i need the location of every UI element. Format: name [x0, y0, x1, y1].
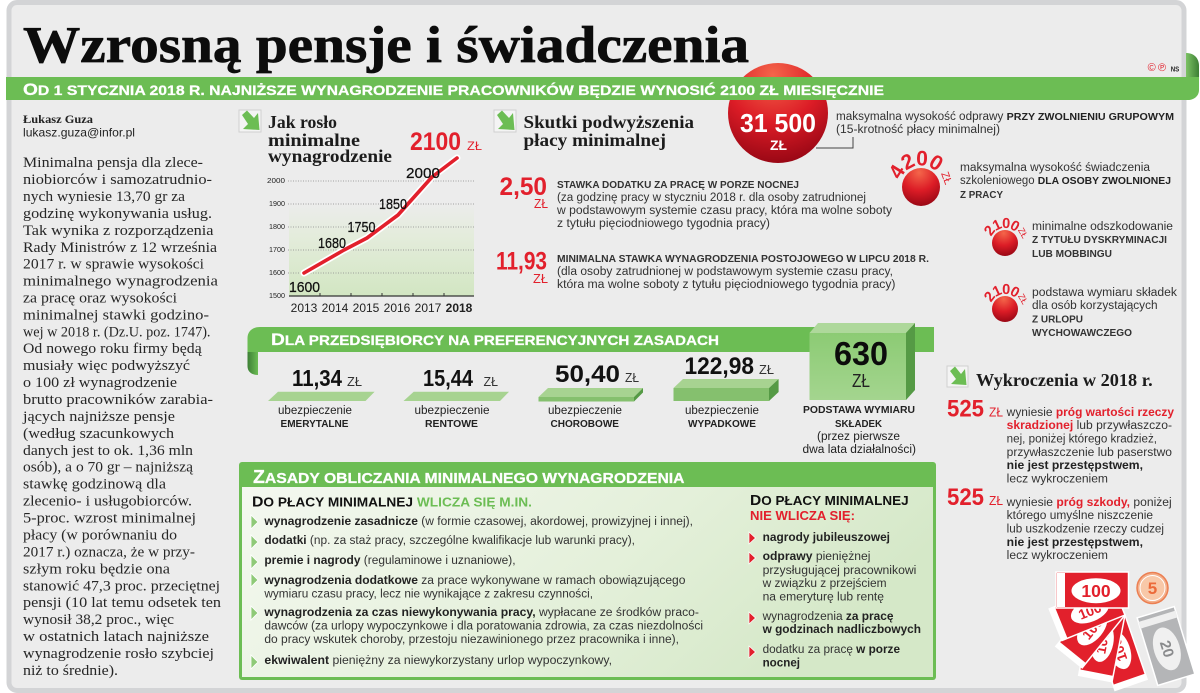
contribution: disability: ubezpieczenie: [414, 405, 490, 417]
value: 2,50 zł: ZŁ: [534, 197, 548, 211]
icon: banknotes and coin: 100: [1108, 636, 1130, 663]
body text column: szłym roku będzie ona: [23, 561, 171, 577]
text: discrimination compensation: LUB MOBBINGU: [1032, 248, 1112, 260]
line chart: minimum wage: 1600: [269, 270, 285, 277]
value: 31 500 zł: 31 500: [740, 108, 816, 138]
icon: banknotes and coin: 20: [1156, 639, 1177, 659]
body text column: (według szacunkowych: [23, 426, 175, 442]
list: included items: premie i nagrody (regulaminowe i uznaniowe),: [264, 555, 516, 567]
green banner: [6, 53, 1199, 100]
text: night work allowance: STAWKA DODATKU ZA PRACĘ W PORZE NOCNEJ: [557, 179, 799, 191]
red ball: 2100 zł contribution base: ZŁ: [1016, 292, 1030, 306]
red ball: 2100 zł compensation: ZŁ: [1016, 226, 1030, 240]
contribution: accident: ubezpieczenie: [685, 405, 759, 417]
red ball: 2100 zł contribution base: 2100: [984, 284, 1020, 302]
line chart: minimum wage: 2014: [322, 301, 349, 315]
list: excluded items: na emeryturę lub rentę: [763, 592, 884, 604]
body text column: danych jest to ok. 1,36 mln: [23, 443, 194, 459]
body text column: godzinę wykonywania usług.: [23, 206, 212, 222]
list: excluded items: w związku z przejściem: [762, 578, 887, 590]
body text column: stanowić 47,3 proc. przeciętnej: [23, 578, 220, 594]
icon: banknotes and coin: [1049, 572, 1195, 690]
body text column: zlecenio- i usługobiorców.: [23, 494, 192, 510]
text: downtime pay: (dla osoby zatrudnionej w podstawowym systemie czasu pracy,: [557, 266, 893, 278]
line chart: minimum wage: 2000: [406, 165, 440, 182]
big red circle: 31 500 zł: [728, 63, 828, 163]
body text column: Tak wynika z rozporządzenia: [23, 223, 214, 239]
text: downtime pay: MINIMALNA STAWKA WYNAGRODZENIA POSTOJOWEGO W LIPCU 2018 R.: [557, 253, 929, 265]
line chart: minimum wage: 2013: [291, 301, 318, 315]
text: training benefit: maksymalna wysokość świadczenia: [960, 162, 1151, 174]
body text column: [22, 155, 222, 679]
contribution: accident: ZŁ: [759, 363, 774, 377]
subheading: excluded: [750, 492, 909, 523]
list: excluded items: wynagrodzenia za pracę: [762, 611, 893, 623]
line chart: minimum wage: 1800: [269, 224, 285, 231]
list: included items: wynagrodzenie zasadnicze (w formie czasowej, akordowej, prowizyjnej i innej),: [263, 516, 693, 528]
author: Łukasz Guza: [23, 114, 93, 126]
contribution: disability: [404, 365, 509, 430]
line chart: minimum wage: 2018: [446, 301, 473, 315]
offence: theft threshold: przywłaszczenie lub paserstwo: [1007, 447, 1172, 459]
body text column: za pracę oraz wysokości: [23, 290, 177, 306]
red ball: 4200 zł: ZŁ: [938, 170, 954, 186]
list: excluded items: odprawy pieniężnej: [763, 551, 870, 563]
line chart: minimum wage: 1700: [269, 247, 285, 254]
label: contribution base: (przez pierwsze: [817, 431, 900, 443]
body text column: niż to średnie).: [23, 663, 118, 679]
contribution: accident: [674, 353, 779, 430]
line chart: minimum wage: [267, 128, 482, 315]
body text column: 5-proc. wzrost minimalnej: [23, 510, 196, 526]
panel heading: ZASADY OBLICZANIA MINIMALNEGO WYNAGRODZENIA: [253, 467, 685, 487]
body text column: niobiorców i samozatrudnio-: [23, 172, 212, 188]
body text column: osób), a o 70 gr – najniższą: [23, 460, 194, 476]
line chart: minimum wage: 1600: [289, 279, 320, 296]
text: parental leave contributions: [1032, 287, 1177, 339]
offence: theft threshold: nej, poniżej którego kradzież,: [1007, 434, 1157, 446]
icon: arrow effects heading: [494, 110, 516, 132]
line chart: minimum wage: 2100: [410, 128, 461, 156]
value: 31 500 zł: [740, 108, 853, 153]
contribution: sickness: ubezpieczenie: [548, 405, 622, 417]
body text column: wynagrodzenie rosło szybciej: [23, 646, 214, 662]
contribution: accident: 122,98: [684, 353, 754, 380]
line chart: minimum wage: 1680: [318, 235, 346, 252]
title: Wzrosną pensje i świadczenia: [23, 17, 749, 74]
red ball: 2100 zł compensation: 2100: [984, 218, 1020, 236]
panel: calculation rules: [239, 462, 936, 680]
red ball: 2100 zł contribution base: [984, 284, 1030, 322]
list: included items: ekwiwalent pieniężny za niewykorzystany urlop wypoczynkowy,: [264, 655, 612, 667]
label: contribution base: SKŁADEK: [835, 419, 883, 430]
body text column: Od nowego roku firmy będą: [23, 341, 202, 357]
heading: offences: Wykroczenia w 2018 r.: [976, 370, 1153, 390]
cube: 630 zł: 630: [834, 335, 888, 372]
offence: damage threshold: lub uszkodzenie rzeczy cudzej: [1007, 524, 1164, 536]
text: night work allowance: [556, 179, 892, 230]
text: parental leave contributions: podstawa wymiaru składek: [1032, 287, 1177, 299]
text: downtime pay: [557, 253, 929, 291]
contribution: pension: EMERYTALNE: [280, 419, 349, 430]
text: group layoff severance: [836, 111, 1174, 136]
line chart: minimum wage: 2017: [415, 301, 442, 315]
body text column: wynosił 38,2 proc., więc: [23, 612, 174, 628]
contribution: sickness: 50,40: [555, 361, 620, 388]
contribution: pension: 11,34: [292, 365, 342, 391]
line chart: minimum wage: 2000: [267, 178, 285, 185]
value: 11,93 zł: ZŁ: [533, 272, 548, 286]
subheading: excluded: NIE WLICZA SIĘ:: [750, 508, 855, 523]
contribution: disability: 15,44: [423, 365, 473, 391]
offence: theft threshold: lecz wykroczeniem: [1007, 474, 1108, 486]
text: group layoff severance: (15-krotność płacy minimalnej): [836, 124, 1000, 136]
text: parental leave contributions: dla osób korzystających: [1032, 300, 1158, 312]
list: excluded items: [749, 532, 921, 670]
value: 11,93 zł: 11,93: [496, 248, 547, 276]
offence: theft threshold: 525: [947, 396, 984, 423]
line chart: minimum wage: 1750: [348, 219, 376, 236]
text: parental leave contributions: WYCHOWAWCZEGO: [1032, 327, 1132, 339]
text: discrimination compensation: minimalne odszkodowanie: [1032, 221, 1173, 233]
value: 2,50 zł: 2,50: [500, 173, 547, 201]
text: night work allowance: w podstawowym systemie czasu pracy, która ma wolne soboty: [556, 205, 892, 217]
red ball: 2100 zł compensation: [984, 218, 1030, 256]
list: included items: wymiaru czasu pracy, lecz nie wynikające z zakresu czynności,: [263, 589, 593, 601]
body text column: o 100 zł wynagrodzenie: [23, 375, 177, 391]
offence: damage threshold: nie jest przestępstwem,: [1007, 537, 1143, 549]
body text column: wej w 2018 r. (Dz.U. poz. 1747).: [23, 324, 210, 340]
value: 31 500 zł: ZŁ: [770, 137, 787, 153]
copyright marks: [1148, 62, 1179, 74]
line chart: minimum wage: 2016: [384, 301, 411, 315]
offence: damage threshold: wyniesie próg szkody, poniżej: [1006, 497, 1172, 509]
heading: effects: Skutki podwyższenia: [524, 112, 694, 132]
icon: banknotes and coin: 100: [1076, 599, 1104, 623]
body text column: stawkę godzinową dla: [23, 477, 167, 493]
text: discrimination compensation: Z TYTUŁU DYSKRYMINACJI: [1032, 234, 1167, 246]
banner: entrepreneurs: DLA PRZEDSIĘBIORCY NA PREFERENCYJNYCH ZASADACH: [271, 330, 719, 349]
offence: theft threshold: ZŁ: [989, 405, 1003, 420]
heading: effects: płacy minimalnej: [524, 130, 666, 150]
cube: 630 zł: ZŁ: [852, 371, 870, 391]
list: included items: dodatki (np. za staż pracy, szczególne kwalifikacje lub warunki pracy),: [264, 535, 635, 547]
heading: chart: wynagrodzenie: [268, 146, 392, 166]
author: [23, 114, 135, 140]
body text column: minimalnej stawki godzino-: [23, 307, 209, 323]
contribution: accident: WYPADKOWE: [688, 419, 756, 430]
contribution: sickness: [538, 361, 643, 430]
list: excluded items: nocnej: [763, 658, 800, 670]
list: included items: [251, 515, 703, 669]
line chart: minimum wage: 1500: [269, 293, 285, 300]
label: contribution base: [802, 405, 916, 456]
icon: arrow chart heading: [239, 110, 261, 132]
contribution: pension: ZŁ: [347, 375, 362, 389]
contribution: sickness: ZŁ: [625, 371, 639, 385]
text: downtime pay: która ma wolne soboty z tytułu pięciodniowego tygodnia pracy): [557, 279, 896, 291]
body text column: Rady Ministrów z 12 września: [23, 240, 218, 256]
body text column: musiały więc podwyższyć: [23, 358, 190, 374]
text: parental leave contributions: Z URLOPU: [1032, 314, 1083, 326]
contribution: disability: RENTOWE: [425, 419, 478, 430]
author: lukasz.guza@infor.pl: [23, 126, 135, 140]
list: included items: wynagrodzenia dodatkowe za prace wykonywane w ramach obowiązującego: [263, 575, 686, 587]
contribution: pension: ubezpieczenie: [278, 405, 352, 417]
list: excluded items: dodatku za pracę w porze: [763, 644, 900, 656]
value: 11,93 zł: [496, 248, 548, 286]
icon: banknotes and coin: 100: [1092, 629, 1113, 655]
offence: damage threshold: którego umyślne niszczenie: [1007, 510, 1153, 522]
subheading: included: DO PŁACY MINIMALNEJ WLICZA SIĘ M.IN.: [252, 494, 532, 511]
body text column: minimalnego wynagrodzenia: [23, 274, 219, 290]
offence: theft threshold: wyniesie próg wartości rzeczy: [1006, 407, 1175, 419]
offence: damage threshold: ZŁ: [989, 493, 1003, 508]
offence: theft threshold: nie jest przestępstwem,: [1007, 460, 1143, 472]
list: included items: do pracy wskutek choroby, przestoju niezawinionego przez pracownika i inne),: [264, 634, 679, 646]
line chart: minimum wage: 2015: [353, 301, 380, 315]
body text column: 2017 r.) oznacza, że w przy-: [23, 544, 195, 560]
copyright marks: ©: [1148, 62, 1156, 74]
text: training benefit: Z PRACY: [960, 189, 1003, 201]
cube: 630 zł: [810, 323, 915, 400]
copyright marks: NS: [1171, 67, 1179, 74]
line chart: minimum wage: ZŁ: [467, 139, 482, 153]
contribution: pension: [268, 365, 375, 430]
list: excluded items: przysługującej pracownikowi: [763, 565, 916, 577]
body text column: płacy (w porównaniu do: [23, 528, 177, 544]
body text column: 2017 r. w sprawie wysokości: [23, 257, 204, 273]
offence: theft threshold: [947, 396, 1175, 486]
list: excluded items: w godzinach nadliczbowych: [762, 624, 921, 636]
body text column: jących najniższe pensje: [22, 409, 175, 425]
offence: theft threshold: skradzionej lub przywłaszczo-: [1007, 420, 1172, 432]
label: contribution base: PODSTAWA WYMIARU: [803, 405, 915, 416]
heading: chart: minimalne: [268, 130, 360, 150]
green banner: OD 1 STYCZNIA 2018 R. NAJNIŻSZE WYNAGRODZENIE PRACOWNIKÓW BĘDZIE WYNOSIĆ 2100 ZŁ MIESIĘCZNIE: [23, 80, 884, 99]
offence: damage threshold: 525: [947, 484, 984, 511]
icon: banknotes and coin: 100: [1081, 581, 1111, 601]
list: excluded items: nagrody jubileuszowej: [763, 532, 890, 544]
offence: damage threshold: lecz wykroczeniem: [1007, 550, 1108, 562]
list: included items: dawców (za urlopy wypoczynkowe i dla poratowania zdrowia, za czas niezdolności: [264, 620, 703, 632]
text: discrimination compensation: [1032, 221, 1173, 260]
red ball: 4200 zł: [890, 150, 954, 206]
red ball: 4200 zł: 4200: [890, 150, 942, 178]
heading: chart: Jak rosło: [268, 112, 337, 132]
icon: arrow offences heading: [947, 366, 968, 387]
banner: entrepreneurs: [248, 327, 934, 375]
offence: damage threshold: [947, 484, 1172, 562]
text: night work allowance: z tytułu pięciodniowego tygodnia pracy): [557, 218, 770, 230]
body text column: pensji (10 lat temu odsetek ten: [23, 595, 222, 611]
heading: effects: [524, 112, 694, 150]
label: contribution base: dwa lata działalności): [802, 444, 916, 456]
text: group layoff severance: maksymalna wysokość odprawy PRZY ZWOLNIENIU GRUPOWYM: [836, 111, 1174, 123]
body text column: brutto pracowników zarabia-: [23, 392, 213, 408]
text: night work allowance: (za godzinę pracy w styczniu 2018 r. dla osoby zatrudnionej: [557, 192, 866, 204]
body text column: nych wyniesie 13,70 gr za: [23, 189, 186, 205]
line chart: minimum wage: 1850: [379, 196, 407, 213]
contribution: sickness: CHOROBOWE: [550, 419, 619, 430]
icon: banknotes and coin: 5: [1148, 579, 1157, 598]
list: included items: wynagrodzenia za czas niewykonywania pracy, wypłacane ze środków praco-: [263, 607, 699, 619]
text: training benefit: szkoleniowego DLA OSOBY ZWOLNIONEJ: [960, 175, 1171, 187]
body text column: w ostatnich latach najniższe: [23, 629, 209, 645]
subheading: excluded: DO PŁACY MINIMALNEJ: [750, 492, 909, 509]
text: training benefit: [960, 162, 1171, 201]
body text column: Minimalna pensja dla zlece-: [23, 155, 203, 171]
copyright marks: ℗: [1158, 62, 1166, 74]
line chart: minimum wage: 1900: [269, 201, 285, 208]
contribution: disability: ZŁ: [484, 375, 498, 389]
icon: banknotes and coin: 100: [1079, 614, 1106, 643]
heading: chart: [268, 112, 392, 166]
